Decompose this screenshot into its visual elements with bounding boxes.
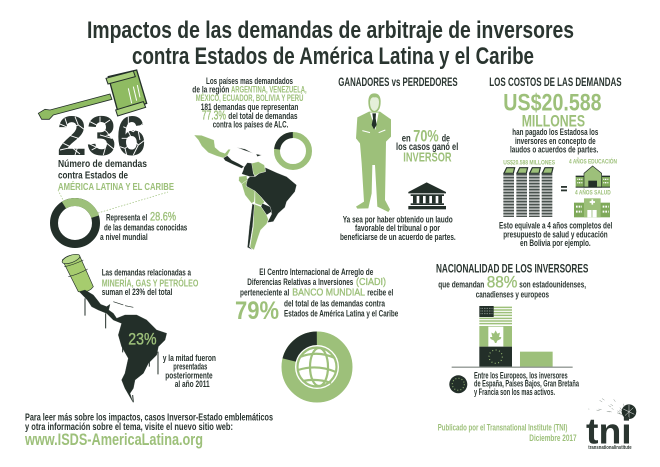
text: ICSID paragraph: 79% (235, 297, 279, 325)
text: number of claims: contra Estados de (58, 170, 128, 182)
text: 70 percent: los casos ganó el (396, 142, 458, 153)
icon: school (576, 166, 610, 188)
footer: website call to action: Para leer más sobre los impactos, casos Inversor-Estado emblemáticos (25, 412, 273, 424)
text: Bolivia comparison: en Bolivia por ejemplo. (520, 238, 591, 248)
text: most active Europeans: Entre los Europeos, los inversores (474, 370, 568, 380)
figure: US$20.588 millones: MILLONES (522, 113, 585, 131)
text: most sued countries: MÉXICO, ECUADOR, BOLIVIA Y PERÚ (196, 92, 303, 103)
text: Bolivia comparison: presupuesto de salud y educación (503, 229, 608, 239)
donut: 79 percent with globe (282, 332, 352, 402)
text: most sued countries: 181 demandas que representan (201, 102, 298, 112)
text: most sued countries: de la región (192, 84, 229, 94)
text: 28.6 percent: a nivel mundial (100, 232, 148, 242)
text: 88 percent: canadienses y europeos (476, 290, 549, 300)
figure: US$20.588 millones: US$20.588 (503, 90, 602, 117)
donut: 28.6 percent (46, 190, 168, 252)
donut: 77.3 percent (275, 133, 311, 169)
text: ICSID paragraph: Estados de América Latina y el Caribe (284, 309, 398, 319)
text: mining, gas and oil: Las demandas relacionadas a (102, 268, 192, 278)
text: half after 2011: y la mitad fueron (163, 353, 216, 363)
text: publisher: Publicado por el Transnational Institute (TNI) (438, 423, 567, 434)
text: 28.6 percent (100, 210, 187, 242)
text: ICSID paragraph: del total de las demandas contra (284, 299, 386, 309)
text: ICSID paragraph (235, 267, 398, 325)
text: cost description (510, 127, 598, 155)
heading: investor nationality: NACIONALIDAD DE LOS INVERSORES (436, 261, 588, 275)
text: award explanation: favorable del tribunal o por (355, 223, 440, 233)
title (87, 17, 574, 70)
icon: investor (356, 93, 391, 212)
text: half after 2011 (163, 353, 216, 389)
text: award explanation: Ya sea por haber obtenido un laudo (343, 214, 453, 224)
equals sign (561, 186, 567, 191)
label: stacks of money: US$20.588 MILLONES (503, 159, 555, 166)
text: 28.6 percent: de las demandas conocidas (104, 223, 187, 233)
logo: tni (586, 397, 636, 451)
text: most sued countries (192, 76, 307, 130)
text: publisher (438, 423, 577, 444)
text: mining, gas and oil: suman el 23% del total (102, 287, 172, 297)
text: ICSID paragraph: BANCO MUNDIAL (292, 287, 365, 299)
logo: tni: tni (586, 410, 632, 451)
icon: hospital (574, 198, 610, 217)
text: most sued countries: 77.3% (202, 107, 226, 122)
text: most sued countries: Los países mas demandados (206, 76, 293, 86)
title: contra Estados de América Latina y el Caribe (132, 43, 534, 70)
text: ICSID paragraph: (CIADI) (356, 276, 386, 288)
icon: globe (298, 348, 336, 386)
text: 88 percent: son estadounidenses, (519, 279, 586, 289)
text: 88 percent (438, 272, 586, 300)
text: 70 percent: 70% (413, 127, 439, 146)
text: 70 percent: de (442, 134, 450, 145)
text: 88 percent: que demandan (438, 279, 484, 289)
text: award explanation (340, 214, 456, 242)
text: number of claims: Número de demandas (58, 158, 147, 170)
logo: tni: transnationalinstitute (588, 445, 632, 451)
text: ICSID paragraph: Diferencias Relativas a Inversiones (247, 277, 353, 287)
text: cost description: han pagado los Estadosa los (512, 127, 598, 137)
text: half after 2011: al año 2011 (175, 379, 210, 389)
flag: Canada (479, 326, 512, 347)
icon: gavel (38, 70, 147, 119)
text: 28.6 percent: 28.6% (150, 210, 176, 224)
map: oil spill with 23 percent: 23% (128, 329, 157, 348)
text: ICSID paragraph: perteneciente al (240, 288, 289, 298)
text: 28.6 percent: Representa el (106, 213, 147, 223)
flag: United States (479, 306, 512, 324)
text: most active Europeans: y Francia son los mas activos. (474, 387, 555, 397)
text: most sued countries: ARGENTINA, VENEZUELA, (231, 84, 307, 94)
label: health: 4 AÑOS SALUD (575, 188, 611, 197)
chart: nationality bars with flags (452, 306, 573, 368)
text: half after 2011: presentadas (173, 362, 207, 372)
icon: EU circle (449, 375, 467, 393)
text: ICSID paragraph: El Centro Internacional de Arreglo de (259, 267, 373, 277)
flag: European Union (479, 347, 512, 367)
text: most sued countries: contra los países de ALC. (213, 120, 288, 130)
text: mining, gas and oil: MINERÍA, GAS Y PETRÓLEO (102, 276, 198, 289)
text: most active Europeans (474, 370, 580, 397)
text: half after 2011: posteriormente (165, 370, 213, 380)
map: Latin America (194, 135, 297, 250)
number 236: 236 (57, 104, 146, 167)
figure: US$20.588 millones (503, 90, 602, 131)
footer: website call to action: y otra información sobre el tema, visite el nuevo sitio web: (25, 421, 233, 433)
icon: bank (408, 182, 446, 209)
footer: website call to action (24, 412, 273, 449)
text: mining, gas and oil (102, 268, 198, 297)
text: 70 percent (396, 127, 458, 165)
footer: website call to action: www.ISDS-AmericaLatina.org (24, 431, 203, 449)
text: most active Europeans: de España, Países Bajos, Gran Bretaña (474, 379, 580, 389)
text: Bolivia comparison (499, 220, 612, 248)
heading: winners vs losers: GANADORES vs PERDEDORES (338, 77, 458, 89)
text: 70 percent: INVERSOR (403, 150, 452, 165)
text: most sued countries: del total de demandas (228, 111, 298, 121)
map: oil spill with 23 percent (79, 290, 167, 402)
text: cost description: inversores en concepto de (515, 136, 596, 146)
text: publisher: Diciembre 2017 (529, 433, 577, 444)
text: 70 percent: en (402, 134, 411, 145)
text: Bolivia comparison: Esto equivale a 4 años completos del (499, 220, 612, 230)
text: number of claims: AMÉRICA LATINA Y EL CARIBE (58, 180, 174, 193)
label: education: 4 AÑOS EDUCACIÓN (569, 157, 617, 166)
text: number of claims (58, 158, 174, 193)
text: ICSID paragraph: recibe el (367, 288, 393, 298)
bar: others (520, 352, 553, 367)
text: cost description: laudos o acuerdos de partes. (510, 145, 598, 155)
text: 88 percent: 88% (487, 272, 517, 291)
icon: money stacks (503, 168, 553, 217)
text: award explanation: beneficiarse de un acuerdo de partes. (340, 232, 456, 242)
icon: oil barrel (61, 252, 93, 292)
